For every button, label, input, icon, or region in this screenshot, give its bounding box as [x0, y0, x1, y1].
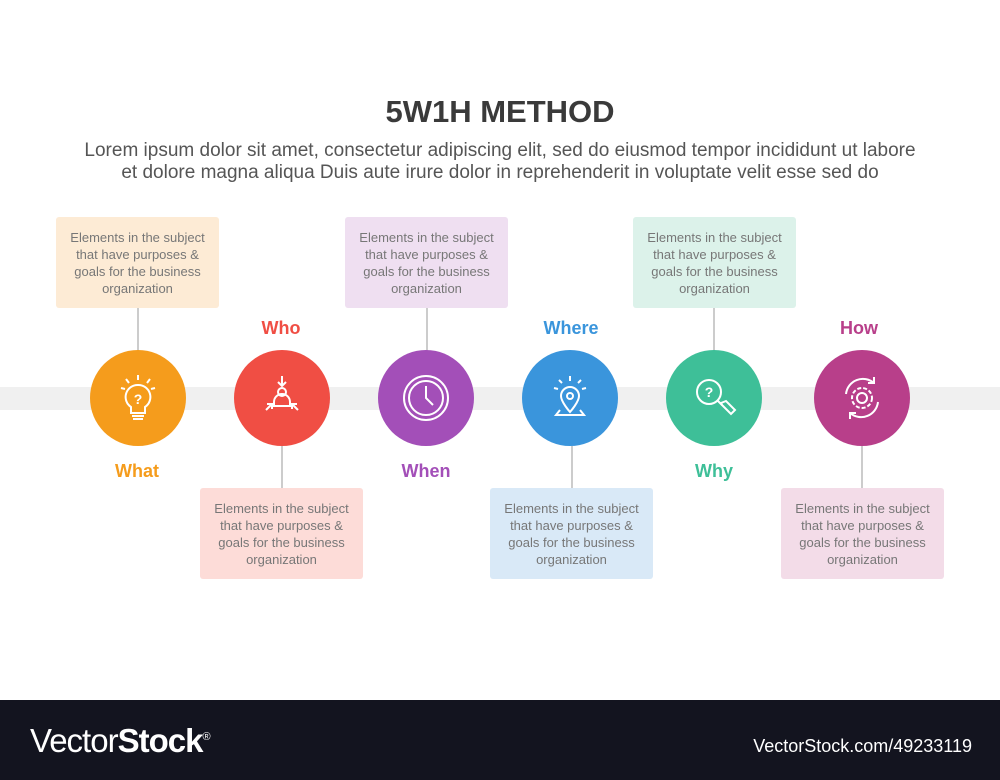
step: How	[781, 318, 944, 579]
subtitle: Lorem ipsum dolor sit amet, consectetur adipiscing elit, sed do eiusmod tempor incididunt ut labore	[84, 140, 916, 161]
text box: when	[345, 217, 508, 308]
timeline band	[0, 387, 1000, 410]
label: who: Who	[262, 318, 300, 338]
subtitle	[84, 140, 916, 183]
text box: what: Elements in the subject that have purposes & goals for the business organization	[70, 230, 205, 296]
circle: when	[378, 350, 474, 446]
circle: what: ?	[134, 391, 142, 407]
subtitle: et dolore magna aliqua Duis aute irure dolor in reprehenderit in voluptate velit esse sed do	[121, 162, 879, 183]
id text: VectorStock.com/49233119	[753, 736, 972, 756]
step: Who	[200, 318, 363, 579]
text box: how: Elements in the subject that have purposes & goals for the business organization	[795, 500, 930, 566]
step: Where	[490, 318, 653, 579]
label: when: When	[402, 461, 450, 481]
step: When	[345, 217, 508, 481]
text box: when: Elements in the subject that have purposes & goals for the business organization	[359, 230, 494, 296]
text box: why: Elements in the subject that have purposes & goals for the business organization	[647, 230, 782, 296]
label: where: Where	[543, 318, 598, 338]
text box: what	[56, 217, 219, 308]
text box: how	[781, 488, 944, 579]
circle: what	[90, 350, 186, 446]
circle: who	[234, 350, 330, 446]
circle: how	[814, 350, 910, 446]
circle: why: ?	[705, 384, 713, 400]
footer bar	[0, 700, 1000, 780]
label: how: How	[840, 318, 878, 338]
label: what: What	[115, 461, 159, 481]
text box: where	[490, 488, 653, 579]
text box: who: Elements in the subject that have purposes & goals for the business organization	[214, 500, 349, 566]
text box: why	[633, 217, 796, 308]
logo: VectorStock®	[30, 722, 210, 759]
label: why: Why	[695, 461, 733, 481]
step: What	[56, 217, 219, 481]
circle: why	[666, 350, 762, 446]
circle: where	[522, 350, 618, 446]
title: 5W1H METHOD	[385, 94, 615, 129]
step: Why	[633, 217, 796, 481]
text box: who	[200, 488, 363, 579]
text box: where: Elements in the subject that have purposes & goals for the business organization	[504, 500, 639, 566]
